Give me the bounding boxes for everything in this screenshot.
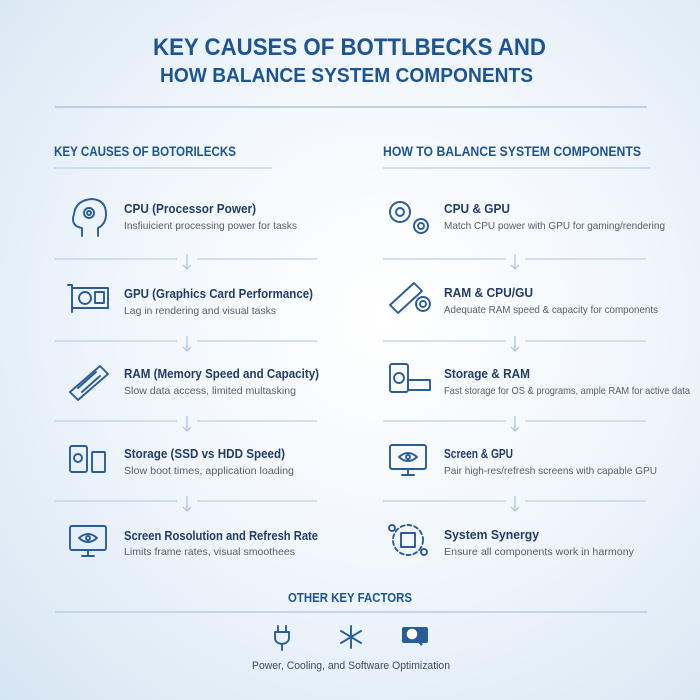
item: Storage & RAM: Storage & RAM <box>444 366 530 381</box>
arrow <box>183 416 191 431</box>
arrow <box>511 336 519 351</box>
item: RAM <box>70 366 319 400</box>
item: CPU: Insfiuicient processing power for tasks <box>124 220 297 232</box>
item: RAM: RAM (Memory Speed and Capacity) <box>124 366 319 381</box>
arrow <box>511 254 519 269</box>
item: RAM: Slow data access, limited multasking <box>124 385 296 397</box>
heading: how to balance: HOW TO BALANCE SYSTEM COMPONENTS <box>383 143 641 159</box>
item: CPU & GPU <box>390 201 665 233</box>
item: Screen & GPU: Pair high-res/refresh screens with capable GPU <box>444 465 657 477</box>
item: Screen & GPU: Screen & GPU <box>444 446 513 461</box>
panel: causes <box>55 199 319 558</box>
item: RAM & CPU <box>390 283 658 316</box>
item: Screen <box>70 526 318 558</box>
item: Screen: Limits frame rates, visual smoothees <box>124 546 295 558</box>
heading: other key factors: OTHER KEY FACTORS <box>288 590 412 605</box>
item: GPU <box>68 285 313 317</box>
arrow <box>511 416 519 431</box>
item: CPU & GPU: Match CPU power with GPU for gaming/rendering <box>444 220 665 232</box>
icon: snowflake <box>341 626 361 648</box>
item: Screen: Screen Rosolution and Refresh Rate <box>124 528 318 543</box>
icon: plug <box>275 626 289 650</box>
item: CPU & GPU: CPU & GPU <box>444 201 510 216</box>
item: Storage: Storage (SSD vs HDD Speed) <box>124 446 285 461</box>
item: RAM & CPU: RAM & CPU/GU <box>444 285 533 300</box>
item: Screen & GPU <box>390 445 657 477</box>
item: GPU: GPU (Graphics Card Performance) <box>124 286 313 301</box>
title: HOW BALANCE SYSTEM COMPONENTS <box>160 65 533 87</box>
item: Storage & RAM <box>390 364 690 397</box>
title: KEY CAUSES OF BOTTLBECKS AND <box>153 34 546 61</box>
item: Storage <box>70 446 294 477</box>
item: RAM & CPU: Adequate RAM speed & capacity for components <box>444 304 658 316</box>
item: System Synergy <box>389 525 635 558</box>
arrow <box>183 336 191 351</box>
heading: key causes: KEY CAUSES OF BOTORILECKS <box>54 143 236 159</box>
item: System Synergy: System Synergy <box>444 527 540 542</box>
arrow <box>511 496 519 511</box>
item: GPU: Lag in rendering and visual tasks <box>124 305 276 317</box>
item: System Synergy: Ensure all components work in harmony <box>444 546 635 558</box>
item: CPU <box>73 199 297 236</box>
arrow <box>183 254 191 269</box>
item: Storage: Slow boot times, application loading <box>124 465 294 477</box>
item: CPU: CPU (Processor Power) <box>124 201 256 216</box>
text: other factors: Power, Cooling, and Software Optimization <box>252 660 450 672</box>
icon: software optimization <box>402 627 428 645</box>
title <box>153 34 546 87</box>
panel: balance <box>383 201 690 558</box>
arrow <box>183 496 191 511</box>
